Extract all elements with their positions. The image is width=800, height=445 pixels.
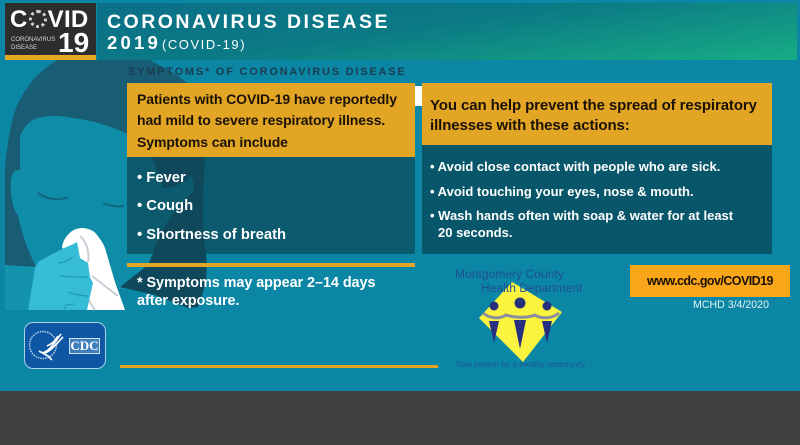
symptom onset note xyxy=(137,275,375,309)
hair silhouette xyxy=(5,60,205,267)
symptoms list xyxy=(137,170,286,243)
logo number 19: 19 xyxy=(58,27,89,58)
action: wash hands: • Wash hands often with soap & water for at least xyxy=(430,208,733,223)
symptom: cough: • Cough xyxy=(137,198,193,214)
panel: prevention header xyxy=(422,83,772,145)
symptom onset note: after exposure. xyxy=(137,293,239,309)
gold rule above note xyxy=(127,263,415,267)
website button xyxy=(630,265,790,297)
main title: 2019(COVID-19) xyxy=(107,32,246,53)
COVID-19 logo xyxy=(5,3,96,60)
logo small text: CORONAVIRUS xyxy=(11,37,55,43)
hand xyxy=(28,242,93,310)
yellow diamond with figures xyxy=(479,282,562,362)
eye right xyxy=(103,203,124,206)
action: wash hands: 20 seconds. xyxy=(438,225,512,240)
action: wash hands xyxy=(430,208,733,240)
panel: prevention header: You can help prevent the spread of respiratory xyxy=(430,97,757,114)
dark footer band xyxy=(0,391,800,445)
panel: symptoms header: Symptoms can include xyxy=(137,134,288,150)
HHS seal xyxy=(28,330,64,361)
logo gold strip xyxy=(5,55,96,60)
symptom: fever: • Fever xyxy=(137,170,186,186)
panel: prevention list xyxy=(422,145,772,254)
Montgomery County Health Department logo xyxy=(455,267,585,369)
panel: symptoms list background xyxy=(127,157,415,254)
action: avoid touching: • Avoid touching your eyes, nose & mouth. xyxy=(430,184,694,199)
finger lines xyxy=(58,257,88,310)
logo word COVID: C VID xyxy=(10,6,89,33)
eye left xyxy=(38,193,68,199)
panel: symptoms header: Patients with COVID-19 have reportedly xyxy=(137,91,397,107)
main title: CORONAVIRUS DISEASE xyxy=(107,11,390,33)
lower neck tone xyxy=(5,265,37,310)
gold rule bottom xyxy=(120,365,438,368)
org name line one: Montgomery County xyxy=(455,267,564,281)
face xyxy=(11,116,192,290)
CDC logo xyxy=(24,322,106,369)
logo small text xyxy=(11,36,55,51)
action: avoid contact: • Avoid close contact with people who are sick. xyxy=(430,159,720,174)
illustration: person sneezing into tissue xyxy=(5,60,187,311)
website button: www.cdc.gov/COVID19 xyxy=(647,274,773,288)
date stamp: MCHD 3/4/2020 xyxy=(693,299,769,311)
panel: symptoms header xyxy=(127,83,415,157)
symptom onset note: * Symptoms may appear 2–14 days xyxy=(137,275,375,291)
panel: prevention header: illnesses with these actions: xyxy=(430,116,630,134)
symptoms subheading: SYMPTOMS* OF CORONAVIRUS DISEASE xyxy=(128,66,406,78)
CDC wordmark: CDC xyxy=(70,338,99,353)
white tab xyxy=(415,86,422,106)
logo small text: DISEASE xyxy=(11,45,37,51)
org name line two: Health Department xyxy=(481,281,583,295)
header banner xyxy=(97,3,797,60)
panel: symptoms header: had mild to severe respiratory illness. xyxy=(137,112,385,128)
tissue fold xyxy=(80,236,118,310)
main title xyxy=(107,11,390,53)
symptom: shortness of breath: • Shortness of breath xyxy=(137,227,286,243)
head silhouette over panels xyxy=(120,157,207,308)
tagline: Your partner for a healthy community xyxy=(456,360,585,369)
tissue xyxy=(62,228,125,310)
